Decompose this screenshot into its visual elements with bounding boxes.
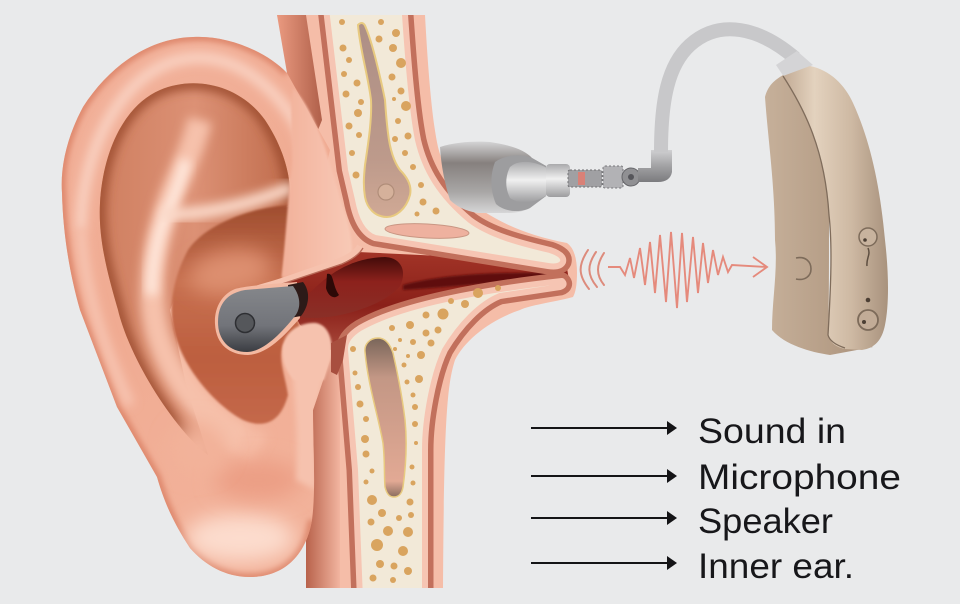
lobe highlight <box>185 514 295 562</box>
lower bone fill <box>345 281 564 600</box>
receiver nose <box>506 162 547 202</box>
legend row: sound in <box>531 412 846 451</box>
legend <box>531 412 901 586</box>
receiver body <box>440 142 546 213</box>
red mark <box>578 172 585 185</box>
oval cavity <box>384 223 470 239</box>
legend row: sound in: Sound in <box>698 412 846 451</box>
spring coil <box>603 166 623 188</box>
concha <box>172 205 300 424</box>
lower control <box>858 310 878 330</box>
lower cavity <box>365 338 406 497</box>
pivot hole <box>628 174 634 180</box>
scapha fill <box>100 83 290 455</box>
upper wall bands <box>325 0 563 266</box>
ear canal cross-section <box>257 15 572 588</box>
scapha dark edge <box>100 83 290 455</box>
concha highlight <box>185 243 275 301</box>
upper ear flap <box>282 88 352 277</box>
hook mark <box>867 248 869 266</box>
canal interior <box>280 252 570 350</box>
legend row: microphone: Microphone <box>698 458 901 497</box>
column silhouette <box>277 15 577 588</box>
receiver collar <box>491 155 546 211</box>
lower wall bands <box>345 281 564 600</box>
legend row: microphone <box>531 458 901 497</box>
flap rim line <box>282 248 363 284</box>
earbud dome <box>215 282 308 355</box>
speaker receiver <box>440 142 672 213</box>
elbow <box>638 150 672 182</box>
connecting tube <box>661 29 795 152</box>
dark canal centre <box>403 273 566 290</box>
body front <box>783 66 888 350</box>
lower control dot <box>862 320 866 324</box>
upper control dot <box>863 238 867 242</box>
bud body <box>218 286 299 352</box>
inner circle <box>378 184 394 200</box>
legend row: speaker <box>531 502 833 541</box>
bud neck <box>288 282 308 318</box>
hearing aid <box>765 51 888 355</box>
upper control <box>859 228 877 246</box>
body back <box>765 75 873 355</box>
scapha tail fade <box>174 417 221 455</box>
column skin, lower <box>306 345 340 588</box>
receiver collar ring <box>546 164 570 197</box>
canal chamber <box>296 257 403 318</box>
sound arcs <box>581 250 604 289</box>
legend row: inner ear <box>531 547 854 586</box>
column skin, upper <box>277 15 322 150</box>
cross fold <box>162 187 292 214</box>
antihelix band <box>170 310 262 454</box>
tragus wall shadow <box>331 335 347 375</box>
legend row: inner ear: Inner ear. <box>698 547 854 586</box>
threaded stem <box>568 170 602 187</box>
pivot <box>622 168 640 186</box>
upper bone section <box>325 0 563 266</box>
lower bone section <box>345 281 564 600</box>
outer ear illustration <box>62 37 331 577</box>
bone spots <box>339 19 501 583</box>
upper bone fill <box>325 0 563 266</box>
side button <box>796 258 811 279</box>
lobe mid tone <box>214 460 302 500</box>
antihelix bright ridge <box>134 114 215 426</box>
upper keyhole cavity <box>358 23 411 217</box>
antihelix highlight <box>152 160 186 295</box>
tragus <box>283 323 332 380</box>
sound wave arrow <box>608 232 767 308</box>
flap lower rim <box>222 246 360 308</box>
indicator dot <box>866 298 870 302</box>
tragus fold highlight <box>292 380 323 488</box>
tube collar <box>776 51 813 77</box>
legend row: speaker: Speaker <box>698 502 833 541</box>
bud rim <box>215 282 300 355</box>
bud port <box>236 314 254 332</box>
body seam <box>783 76 845 348</box>
canal notch <box>326 274 339 297</box>
ear silhouette <box>62 37 331 577</box>
ear shading <box>62 37 326 577</box>
